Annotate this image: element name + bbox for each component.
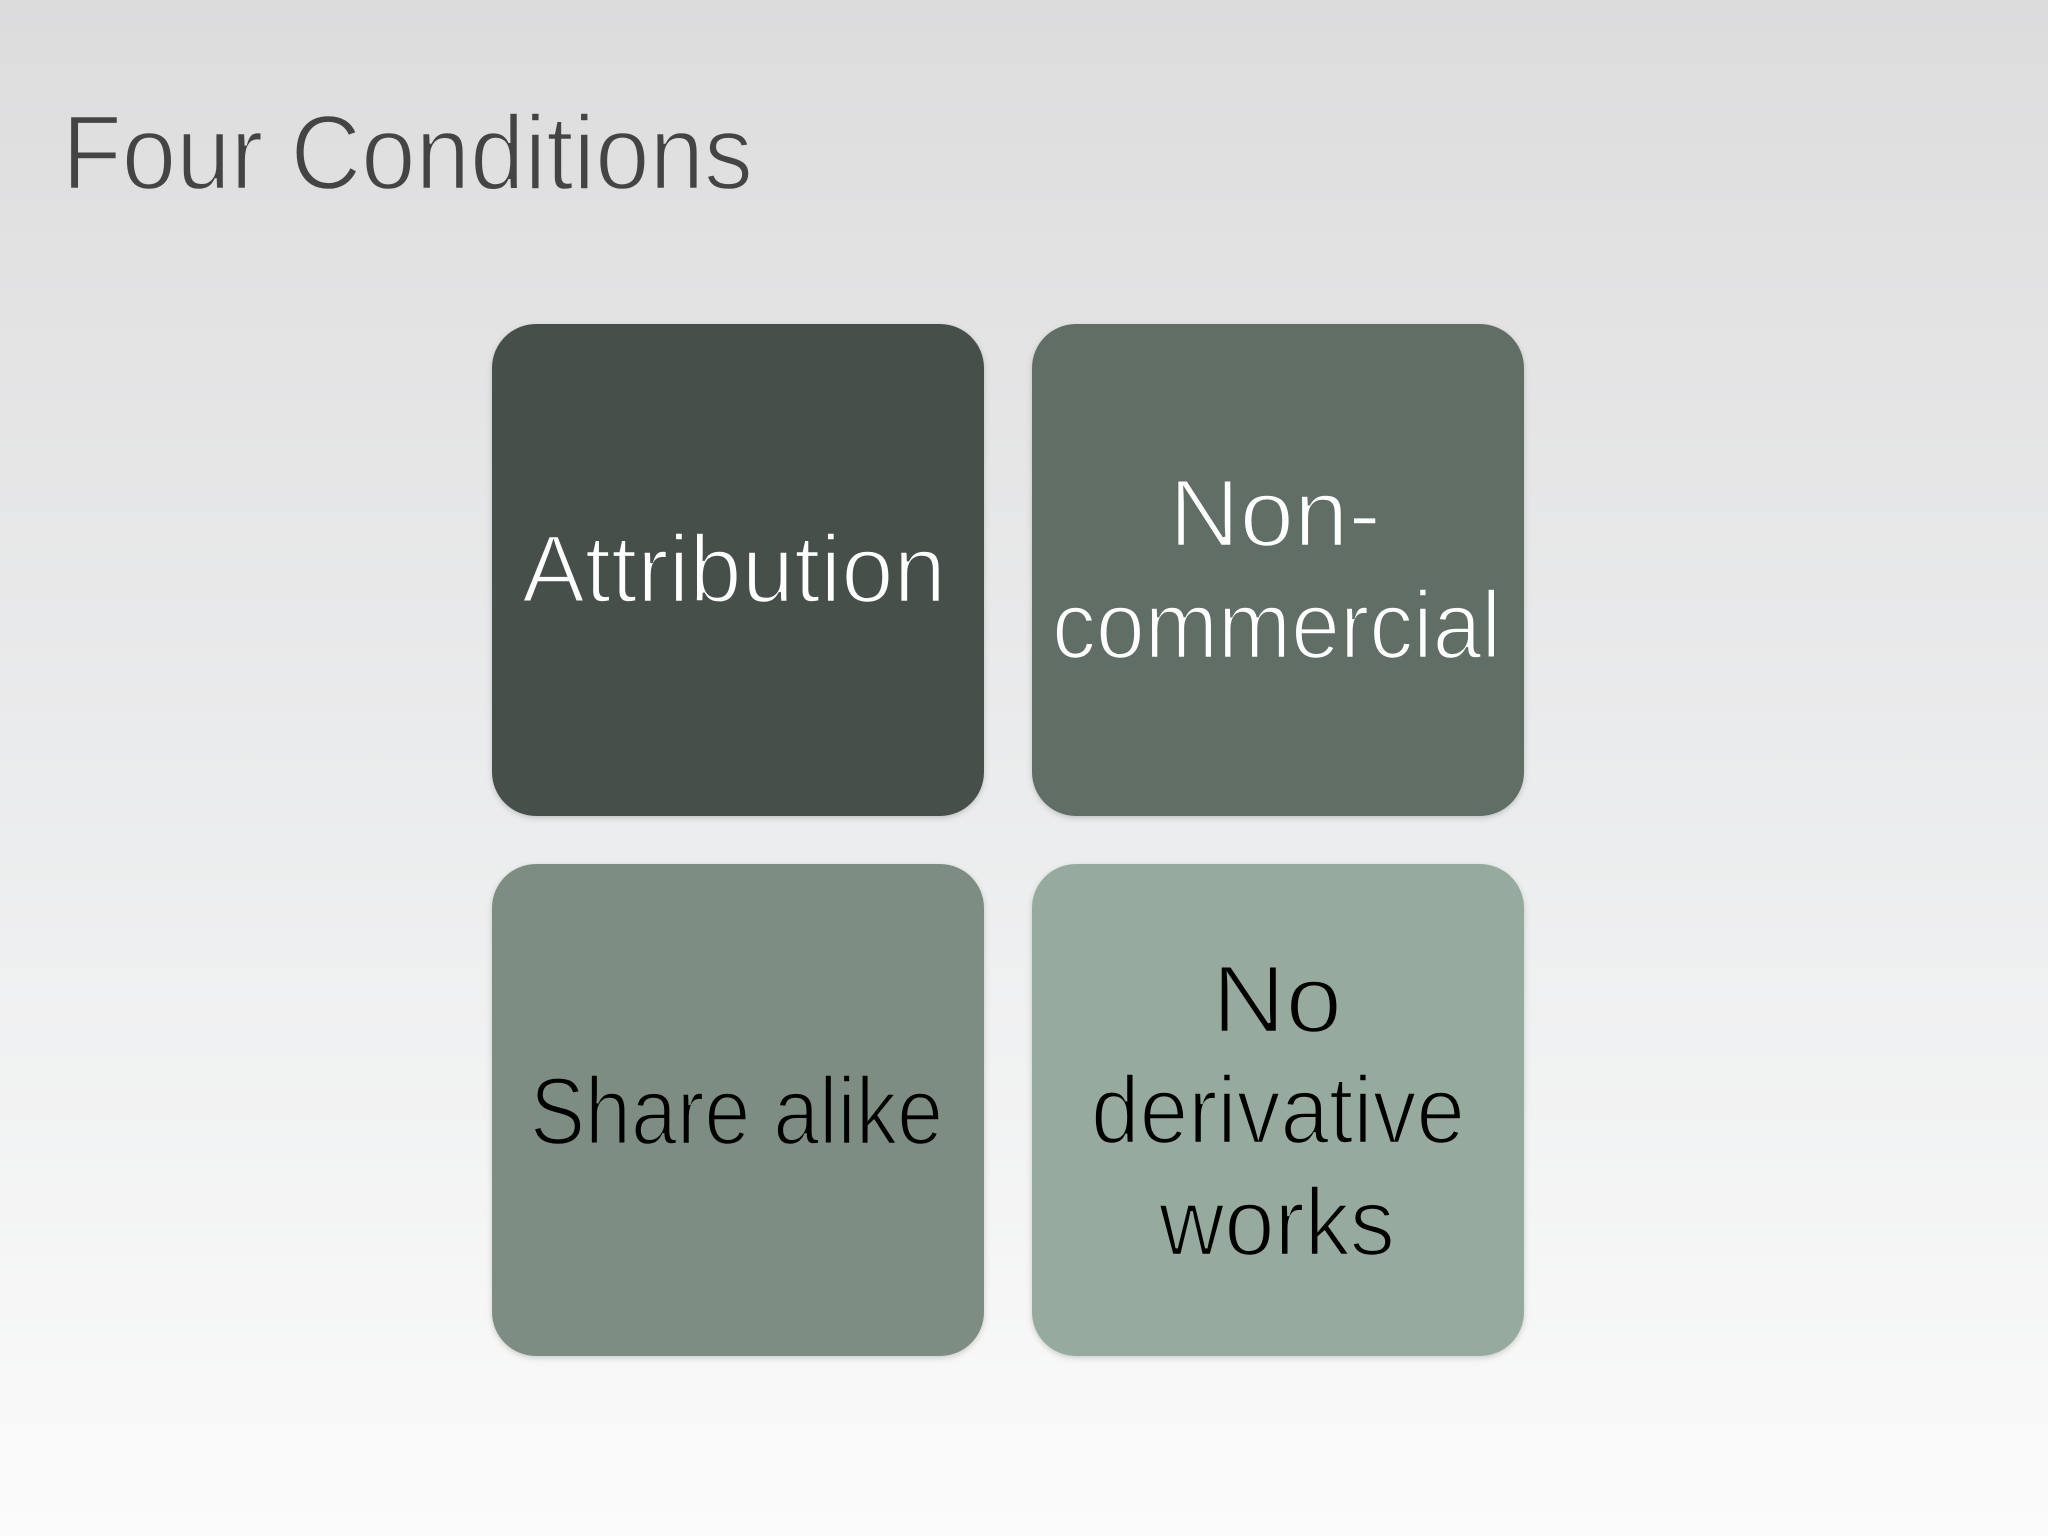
panel: non-commercial: commercial	[1052, 572, 1501, 679]
title: Four Conditions	[62, 94, 753, 212]
panel: attribution	[492, 324, 984, 816]
panel: no derivative works: works	[1158, 1169, 1395, 1276]
panel: no derivative works: No	[1212, 946, 1342, 1053]
panel: share alike	[492, 864, 984, 1356]
panel: no derivative works: derivative	[1091, 1057, 1465, 1164]
panel: attribution: Attribution	[522, 516, 946, 623]
panel: non-commercial	[1032, 324, 1524, 816]
panel: non-commercial: Non-	[1169, 460, 1381, 567]
panel: share alike: Share alike	[530, 1058, 943, 1165]
panel: no derivative works	[1032, 864, 1524, 1356]
